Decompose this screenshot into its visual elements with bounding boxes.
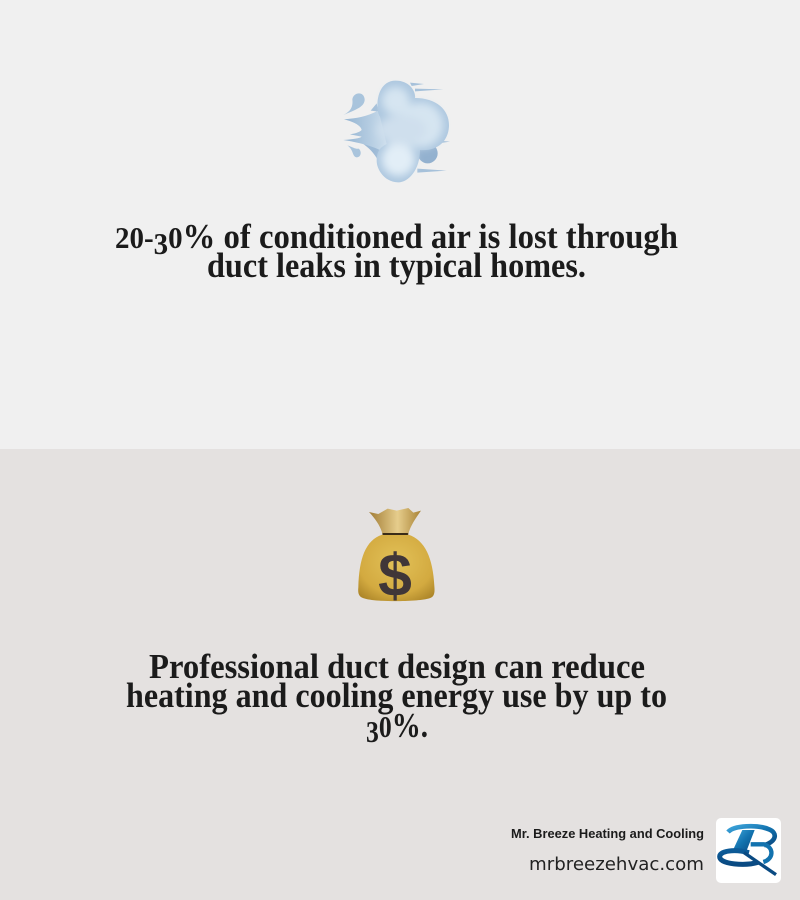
- heading: air loss statistic: 0: [168, 220, 183, 255]
- panel: bottom section background: [0, 449, 800, 900]
- heading: energy savings statistic line 3: %.: [392, 706, 435, 745]
- footer: brand name: Mr. Breeze Heating and Cooling: [511, 826, 704, 841]
- heading: air loss statistic: 3: [154, 226, 168, 261]
- icon: dashing air cloud: [343, 81, 450, 182]
- heading: energy savings statistic line 3: 3: [366, 714, 379, 749]
- heading: air loss statistic: % of conditioned air is lost through: [183, 217, 712, 256]
- heading: energy savings statistic line 2: heating and cooling energy use by up to: [126, 676, 667, 715]
- footer: website: mrbreezehvac.com: [529, 854, 704, 875]
- heading: energy savings statistic line 3: 0: [379, 709, 392, 744]
- icon: money bag: [358, 508, 435, 609]
- logo: [716, 818, 781, 883]
- heading: energy savings statistic: Professional duct design can reduce: [149, 647, 645, 686]
- panel: top section background: [0, 0, 800, 449]
- heading: air loss statistic: 20-: [115, 220, 154, 255]
- dollar sign: $: [378, 541, 412, 609]
- heading: air loss statistic line 2: duct leaks in typical homes.: [207, 246, 586, 285]
